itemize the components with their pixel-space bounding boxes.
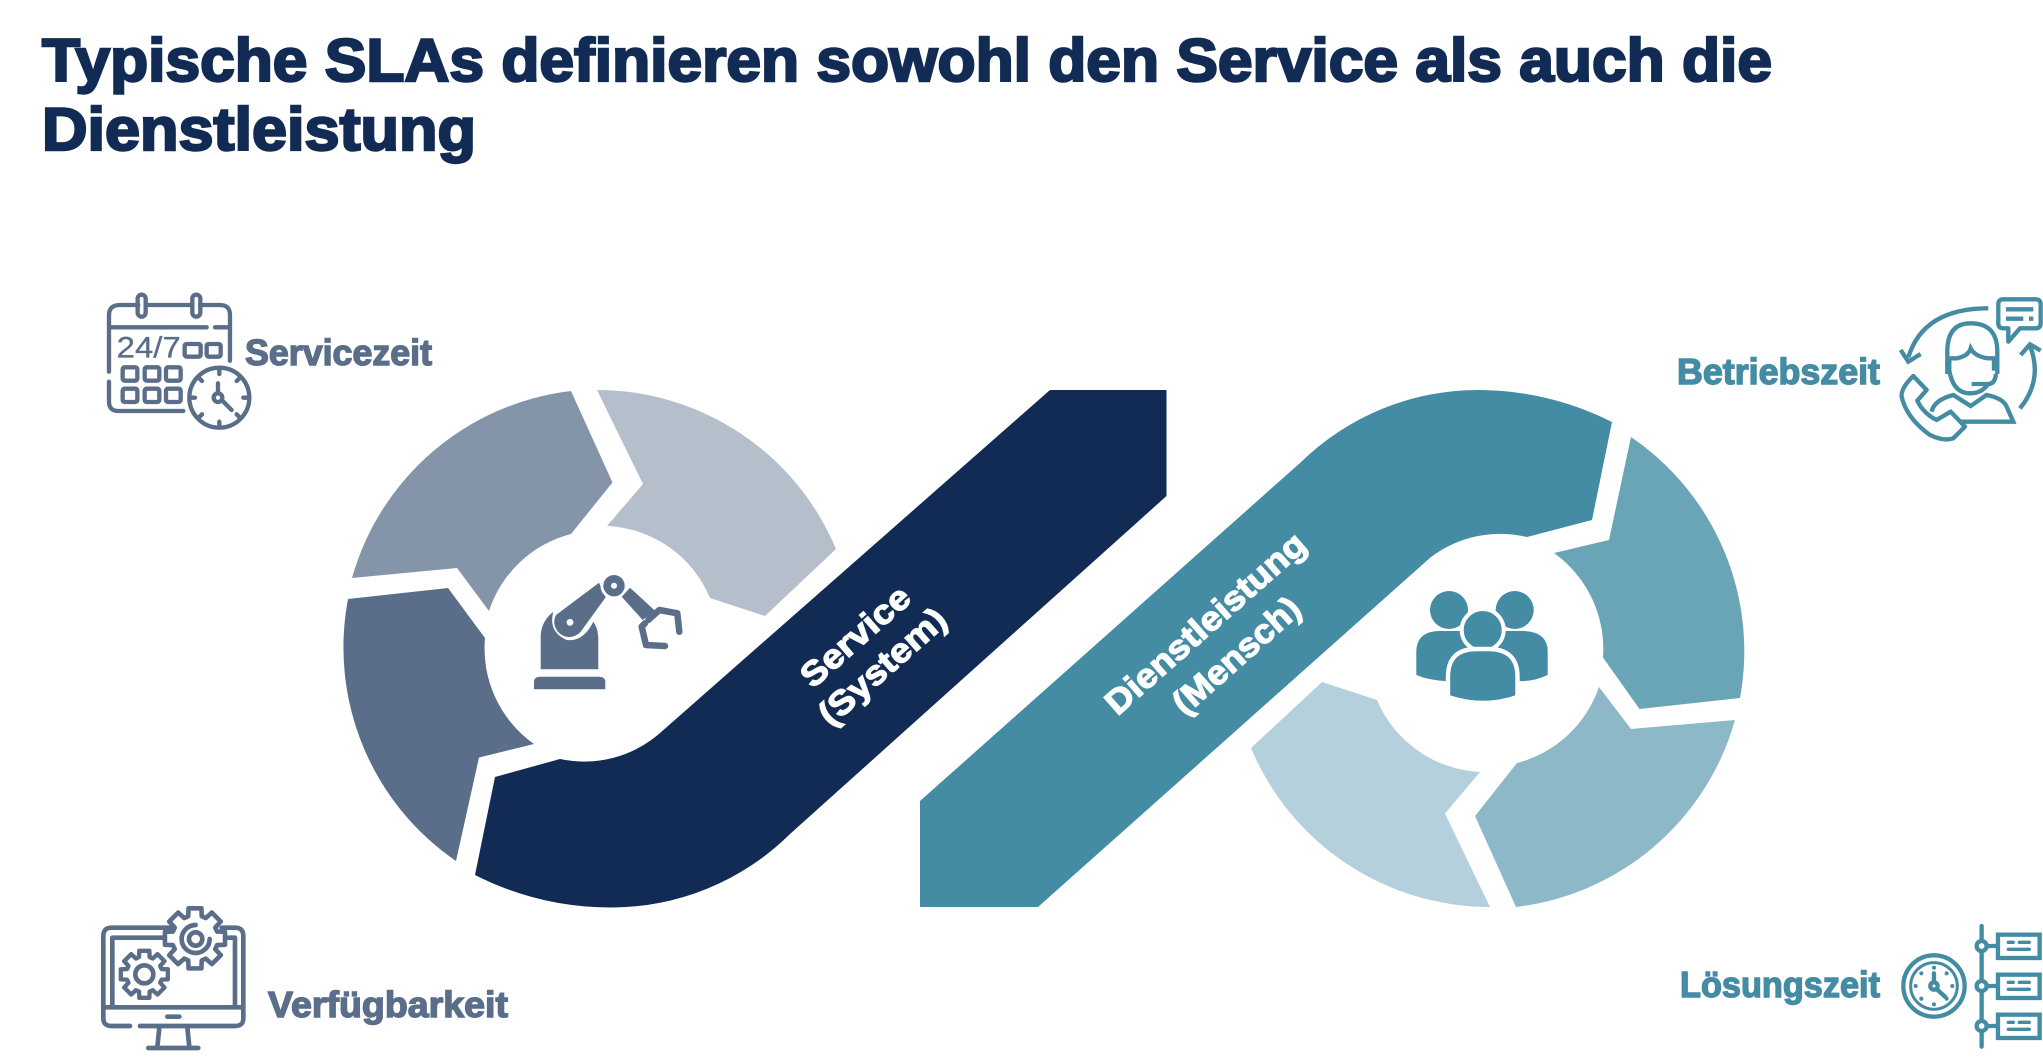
- label: Betriebszeit: Betriebszeit: [1677, 351, 1880, 392]
- segment: dark slate: [343, 588, 534, 861]
- title: [42, 27, 1772, 163]
- segment: pale teal: [1251, 682, 1490, 907]
- segment: soft teal: [1475, 687, 1735, 907]
- label: Lösungszeit: Lösungszeit: [1680, 964, 1880, 1005]
- band label: Service (System): [793, 578, 954, 733]
- label: Servicezeit: Servicezeit: [245, 332, 432, 373]
- band label: Service (System): (System): [811, 600, 954, 733]
- icon: monitor with gears: [103, 908, 243, 1048]
- label: Verfügbarkeit: Verfügbarkeit: [268, 984, 508, 1025]
- band: navy service arrow: [475, 390, 1166, 908]
- icon: clock with timeline: [1903, 926, 2040, 1047]
- title: Typische SLAs definieren sowohl den Service als auch die: [42, 27, 1772, 94]
- title: Dienstleistung: [42, 96, 476, 163]
- band: teal dienstleistung arrow: [920, 390, 1612, 907]
- band label: Dienstleistung (Mensch): (Mensch): [1165, 589, 1308, 722]
- band label: Service (System): Service: [793, 578, 918, 695]
- icon: calendar with clock: 24/7: [117, 332, 181, 365]
- segment: mid teal: [1554, 437, 1744, 709]
- segment: mid slate: [352, 391, 612, 611]
- icon: calendar with clock: [109, 295, 249, 428]
- icon: support agent with phone: [1901, 299, 2041, 439]
- panel: dienstleistung loop (mensch): [920, 390, 1744, 907]
- icon: group of people: [1416, 591, 1548, 703]
- band label: Dienstleistung (Mensch): Dienstleistung: [1098, 525, 1314, 722]
- panel: service loop (system): [343, 390, 1166, 908]
- icon: robot arm: [534, 572, 679, 689]
- segment: light slate: [597, 390, 836, 616]
